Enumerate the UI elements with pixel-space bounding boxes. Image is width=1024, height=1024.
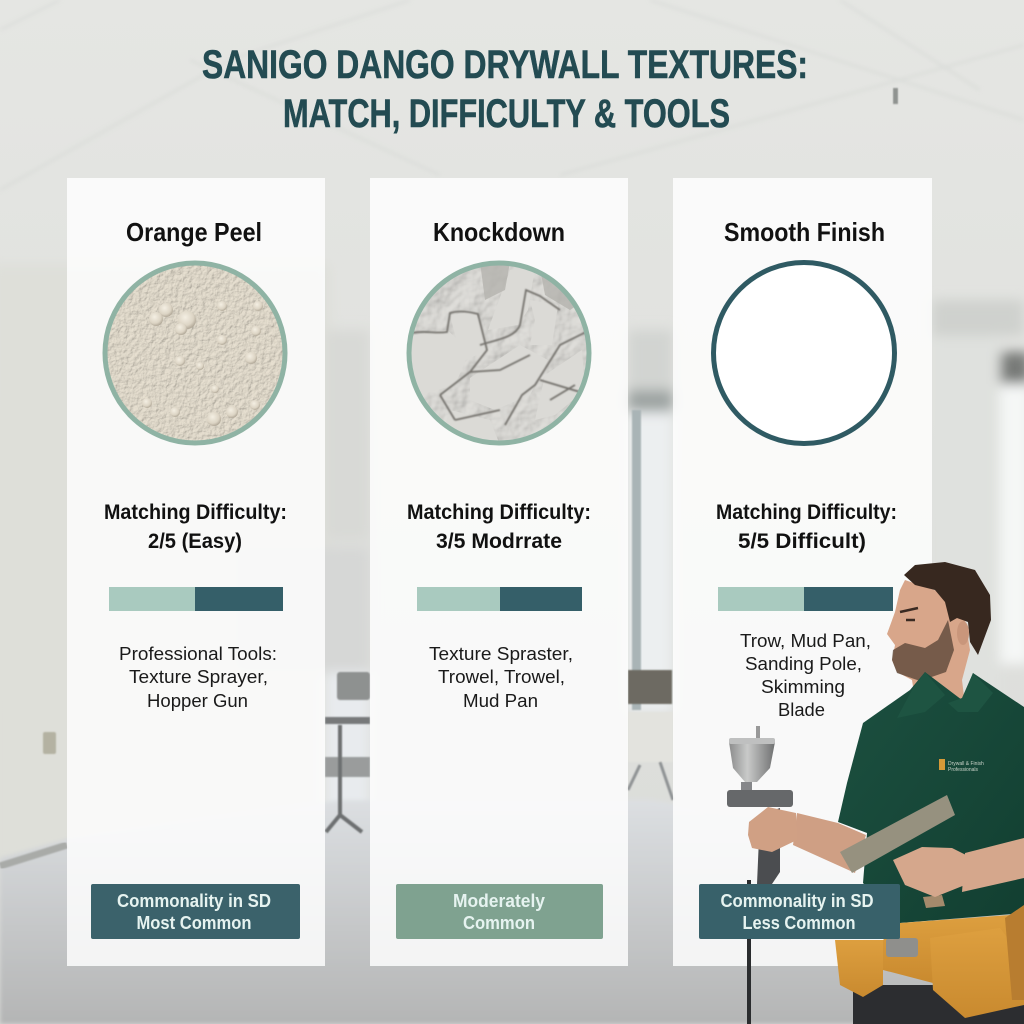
panel 3 heading: Smooth Finish [724,217,885,247]
shirt logo: Professionals [948,767,979,773]
tools list: Professional Tools: [119,644,277,664]
panel 2 heading: Knockdown [433,217,565,247]
spray hose [747,880,751,1024]
worker with spray gun and trowel [727,562,1024,1024]
hair [904,562,991,655]
head and neck [887,580,970,705]
left forearm [793,813,866,873]
commonality badge [91,884,300,939]
shirt logo: Drywall & Finish [948,761,984,767]
spray gun [727,726,793,884]
title: SANIGO DANGO DRYWALL TEXTURES: [202,43,808,87]
commonality badge: Commonality in SD [117,891,271,911]
title [202,43,808,136]
difficulty text: 2/5 (Easy) [148,530,242,553]
trousers [853,985,1024,1024]
difficulty text: 3/5 Modrrate [436,530,562,553]
panel: knockdown [370,178,628,966]
trowel [840,795,955,908]
difficulty text: Matching Difficulty: [716,501,897,524]
right forearm [962,838,1024,892]
hand on trowel [893,847,968,897]
tools list: Trow, Mud Pan, [740,631,871,651]
difficulty bar [718,587,893,611]
tools list: Texture Sprayer, [129,667,268,687]
texture swatch: orange peel [103,261,287,445]
panel 1 heading: Orange Peel [126,217,262,247]
tools list [429,644,573,711]
tools list [740,631,871,720]
difficulty bar [109,587,283,611]
panel: orange peel [67,178,325,966]
texture swatch: smooth [714,262,894,444]
difficulty text [104,501,287,553]
tool belt [835,905,1024,1018]
shirt [838,672,1024,923]
commonality badge: Most Common [136,913,252,933]
title: MATCH, DIFFICULTY & TOOLS [283,92,730,136]
panel: smooth finish [673,178,932,966]
difficulty text [716,501,897,553]
tools list: Blade [778,700,825,720]
commonality badge: Common [463,913,535,933]
difficulty bar [417,587,582,611]
difficulty text: 5/5 Difficult) [738,530,866,553]
tools list: Mud Pan [463,691,538,711]
tools list: Trowel, Trowel, [438,667,565,687]
difficulty text: Matching Difficulty: [104,501,287,524]
difficulty text: Matching Difficulty: [407,501,591,524]
commonality badge panel 3: Commonality in SD [720,891,874,911]
beard [892,620,954,681]
tools list: Texture Spraster, [429,644,573,664]
tools list: Sanding Pole, [745,654,862,674]
commonality badge panel 3: Less Common [742,913,856,933]
difficulty text [407,501,591,553]
texture swatch: knockdown [407,261,591,445]
commonality badge: Moderately [453,891,545,911]
eye and brow [900,608,918,620]
commonality badge [396,884,603,939]
hand on gun [748,807,797,852]
shirt logo [939,759,984,773]
tools list: Hopper Gun [147,691,248,711]
ear [957,621,969,645]
tools list [119,644,277,711]
tools list: Skimming [761,677,845,697]
commonality badge panel 3 [699,884,900,939]
collar [897,672,993,718]
